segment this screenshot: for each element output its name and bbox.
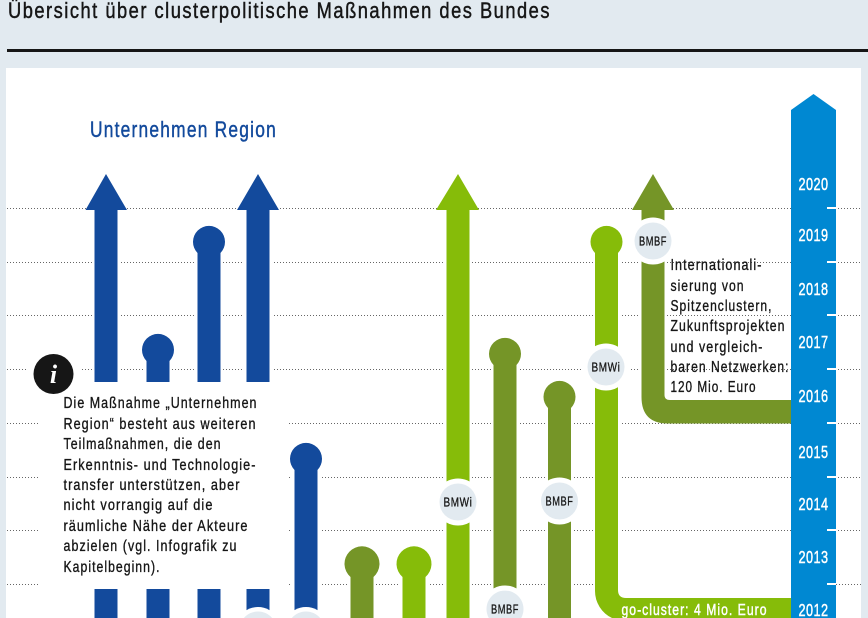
- lollipop: green measure 7: [396, 546, 432, 618]
- badge: BMBF: BMBF: [491, 602, 519, 616]
- badge: partly visible 1: [238, 607, 278, 618]
- lollipop: blue measure 2: [142, 334, 174, 618]
- info text: Teilmaßnahmen, die den: [64, 436, 222, 453]
- lollipop: olive measure 9: [489, 338, 521, 618]
- badge: BMWi: [582, 344, 630, 390]
- info text: Kapitelbeginn).: [64, 559, 160, 576]
- arrow: blue measure 4: [237, 174, 279, 618]
- badge: partly visible 2: [286, 607, 326, 618]
- timeline axis: 2020: [798, 174, 828, 194]
- timeline axis: 2014: [798, 494, 828, 514]
- timeline axis: 2013: [798, 547, 828, 567]
- label: internationalisation: Spitzenclustern,: [670, 298, 772, 315]
- label: internationalisation: [670, 257, 790, 396]
- badge: BMWi: BMWi: [592, 360, 620, 374]
- info text: [64, 395, 258, 576]
- label: internationalisation: sierung von: [670, 278, 744, 295]
- badge: BMBF: [630, 218, 676, 264]
- info text: abzielen (vgl. Infografik zu: [64, 538, 238, 555]
- label: internationalisation: 120 Mio. Euro: [670, 379, 756, 396]
- arrow: blue measure 1: [86, 174, 127, 618]
- lollipop: olive measure 10: [544, 381, 576, 618]
- icon: info: [34, 354, 74, 394]
- info text: transfer unterstützen, aber: [64, 477, 240, 494]
- badge: BMWi: BMWi: [444, 494, 472, 510]
- line: go-cluster: [590, 226, 791, 618]
- info text: Die Maßnahme „Unternehmen: [64, 395, 258, 412]
- lollipop: blue measure 3: [193, 226, 225, 618]
- timeline axis: 2017: [798, 332, 828, 352]
- timeline axis: [791, 94, 836, 618]
- timeline axis: 2018: [798, 279, 828, 299]
- timeline axis: 2016: [798, 386, 828, 406]
- badge: BMWi: [434, 478, 482, 526]
- lollipop: blue measure 5: [290, 443, 322, 618]
- label: internationalisation: Internationali-: [670, 257, 762, 274]
- heading: Unternehmen Region: Unternehmen Region: [90, 117, 277, 142]
- icon: info: i: [50, 360, 58, 389]
- info text: nicht vorrangig auf die: [64, 497, 214, 514]
- timeline axis: 2019: [798, 225, 828, 245]
- info text: räumliche Nähe der Akteure: [64, 518, 248, 535]
- label: internationalisation: baren Netzwerken:: [670, 359, 790, 376]
- arrow: green measure 8: [436, 174, 479, 618]
- label: internationalisation: und vergleich-: [670, 339, 764, 356]
- info box: [27, 347, 289, 589]
- info text: Erkenntnis- und Technologie-: [64, 457, 256, 474]
- badge: BMBF: [536, 478, 583, 524]
- info text: Region“ besteht aus weiteren: [64, 416, 256, 433]
- timeline axis: 2015: [798, 442, 828, 462]
- badge: BMBF: [481, 585, 528, 618]
- label: internationalisation: Zukunftsprojekten: [670, 318, 786, 335]
- badge: BMBF: BMBF: [546, 494, 574, 508]
- arrow: internationalisation: [632, 174, 791, 424]
- badge: BMBF: BMBF: [639, 234, 667, 248]
- lollipop: olive measure 6: [344, 546, 380, 618]
